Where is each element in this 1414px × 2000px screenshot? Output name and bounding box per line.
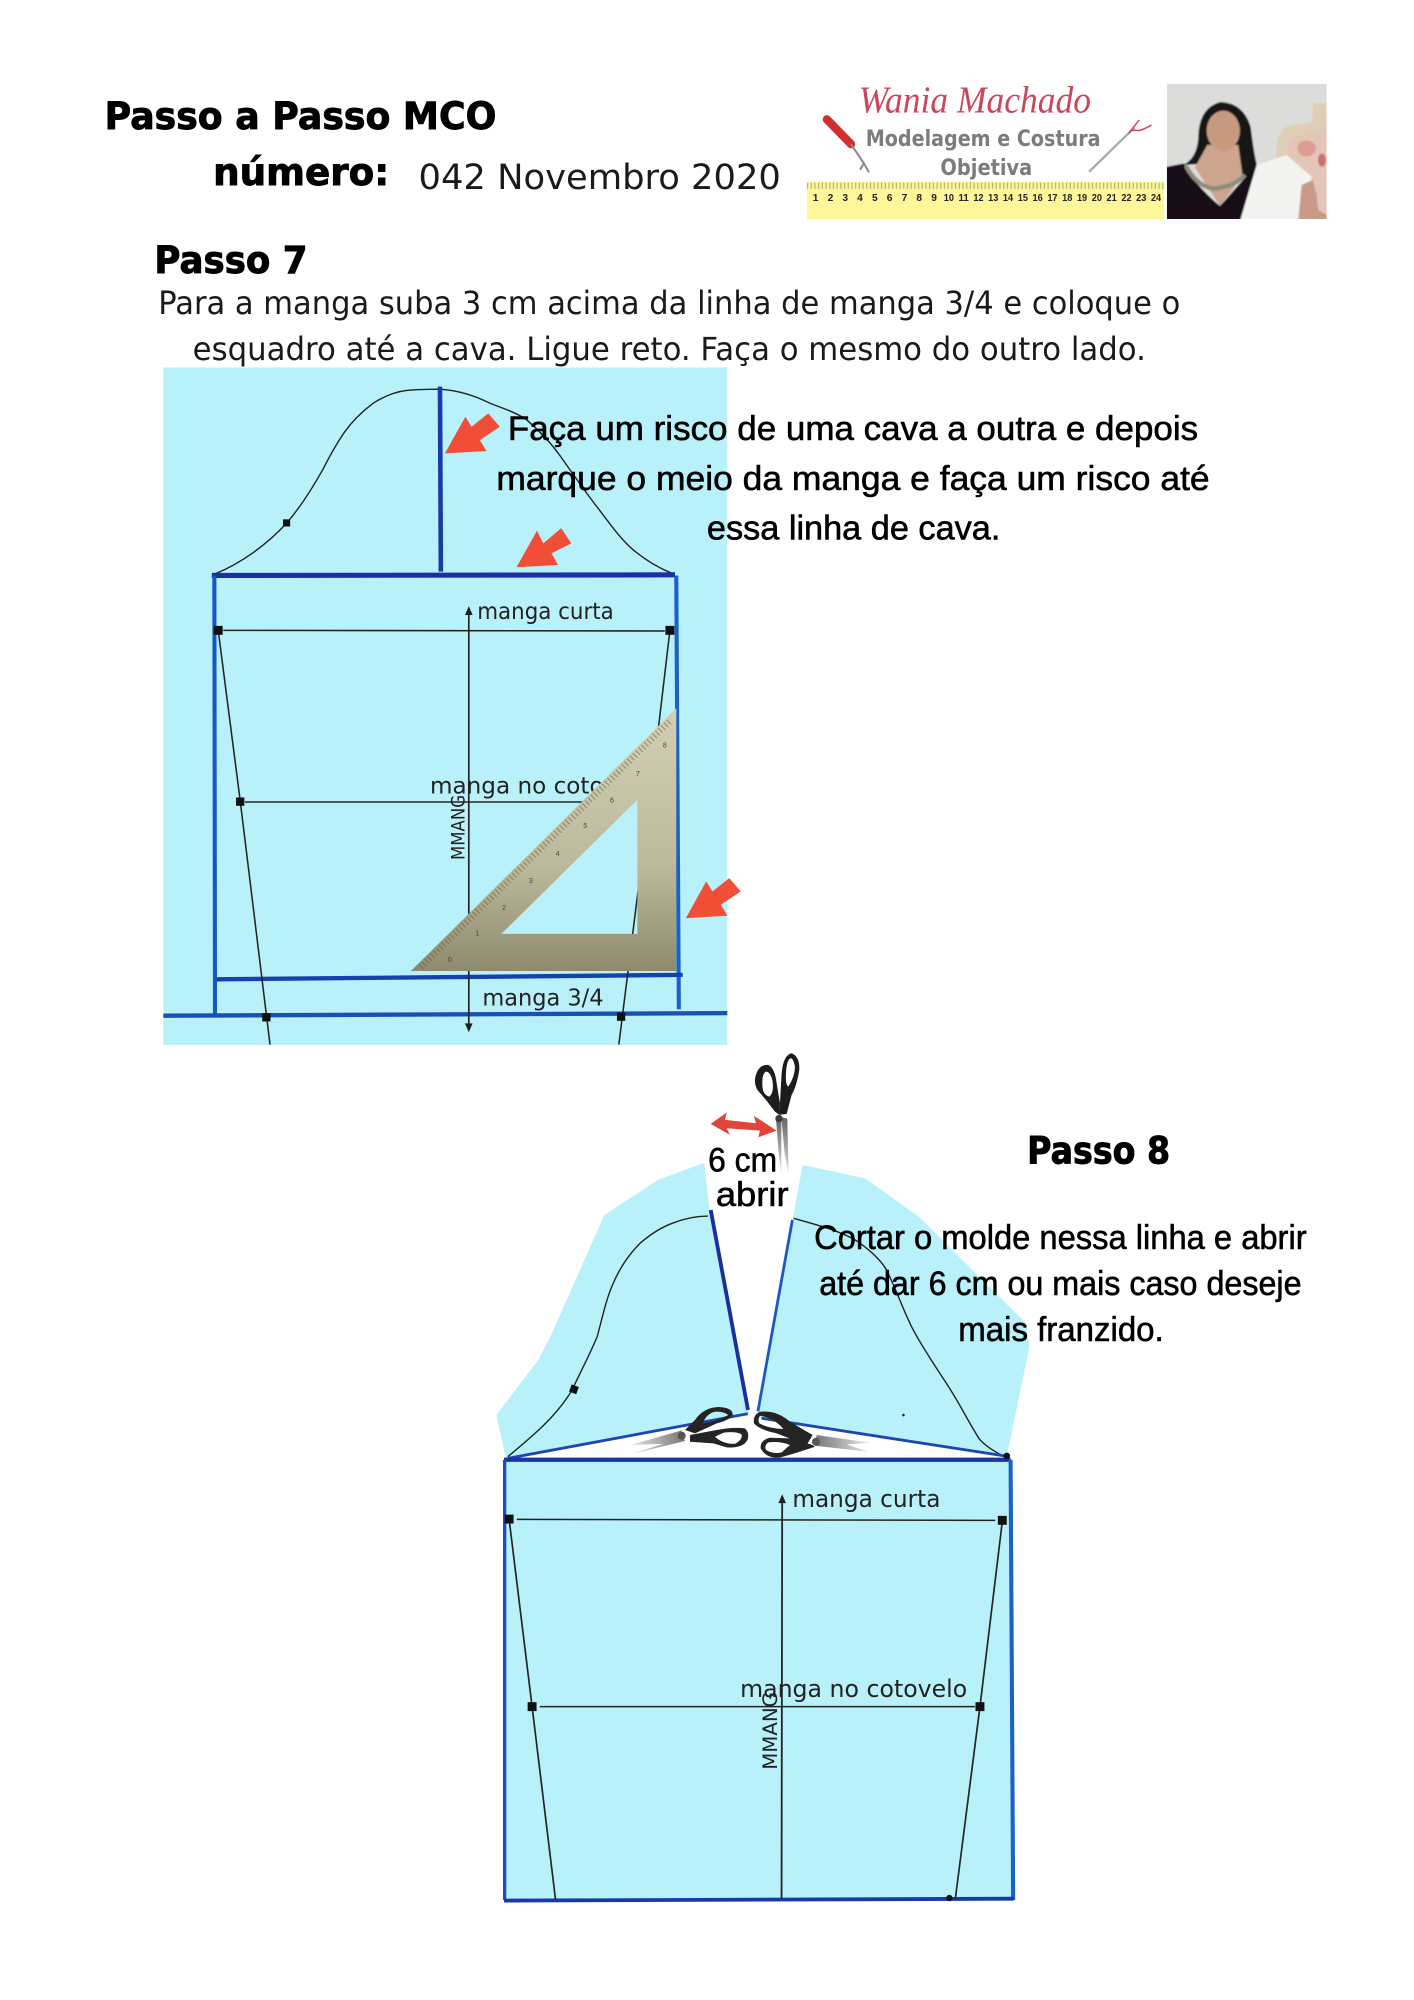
measuring tape: 21 bbox=[1107, 193, 1117, 204]
measuring tape: 19 bbox=[1077, 193, 1087, 204]
text block: risk instruction: marque o meio da manga e faça um risco até bbox=[496, 460, 1210, 498]
header title: número: bbox=[213, 151, 389, 194]
panel: step 7 sleeve pattern bbox=[163, 367, 727, 1045]
text block: risk instruction bbox=[496, 410, 1210, 548]
label: manga 3/4: manga 3/4 bbox=[482, 985, 604, 1011]
text block: step 7 instructions: Para a manga suba 3 cm acima da linha de manga 3/4 e coloque o bbox=[158, 284, 1180, 322]
icon: set square ruler: 3 bbox=[529, 878, 533, 885]
icon: set square ruler: 8 bbox=[663, 743, 667, 750]
text block: step 8 instructions bbox=[814, 1219, 1307, 1349]
text: 6 cm abrir bbox=[708, 1141, 789, 1214]
header title bbox=[105, 95, 781, 198]
measuring tape bbox=[807, 182, 1164, 219]
label: manga no cotovelo: manga no cotovelo bbox=[430, 774, 652, 800]
center cut line bbox=[438, 387, 443, 572]
measuring tape: 8 bbox=[916, 193, 922, 204]
right cap piece bbox=[758, 1165, 1029, 1457]
marker squares bbox=[214, 626, 674, 1021]
measuring tape: 13 bbox=[988, 193, 999, 204]
measuring tape: 7 bbox=[902, 193, 908, 204]
measuring tape: 15 bbox=[1018, 193, 1028, 204]
text: 6 cm abrir: 6 cm bbox=[708, 1141, 777, 1179]
measuring tape: 22 bbox=[1121, 193, 1132, 204]
text block: step 8 instructions: mais franzido. bbox=[958, 1311, 1164, 1349]
icon: scissors right bbox=[754, 1412, 870, 1458]
icon: scissors top bbox=[755, 1053, 799, 1173]
text block: step 7 instructions: esquadro até a cava. Ligue reto. Faça o mesmo do outro lado. bbox=[193, 330, 1146, 368]
measuring tape: 10 bbox=[944, 193, 954, 204]
measuring tape: 12 bbox=[973, 193, 984, 204]
measuring tape: 24 bbox=[1151, 193, 1161, 204]
logo subtitle: Objetiva bbox=[940, 155, 1032, 181]
logo: Modelagem e Costura Objetiva bbox=[806, 79, 1166, 219]
label: MMANG: MMANG bbox=[448, 795, 469, 860]
sleeve cap curve bbox=[214, 389, 671, 574]
measuring tape: 11 bbox=[959, 193, 969, 204]
opened cut lines bbox=[504, 1210, 1014, 1901]
icon: set square ruler: 7 bbox=[636, 771, 640, 778]
measuring tape: 18 bbox=[1062, 193, 1073, 204]
arrow: red double arrow 6 cm bbox=[711, 1113, 777, 1137]
heading: Passo 7: Passo 7 bbox=[154, 239, 308, 282]
logo script name: Wania Machado bbox=[859, 79, 1091, 121]
measuring tape: 5 bbox=[872, 193, 878, 204]
measuring tape: 1 bbox=[813, 193, 819, 204]
measuring tape: 23 bbox=[1136, 193, 1147, 204]
arrow: red pointing at side line bbox=[686, 878, 741, 918]
arrow: red pointing at armhole line bbox=[517, 528, 571, 567]
text block: risk instruction: essa linha de cava. bbox=[707, 510, 1000, 548]
measuring tape: 16 bbox=[1033, 193, 1043, 204]
measuring tape: 17 bbox=[1047, 193, 1058, 204]
text block: step 7 instructions bbox=[158, 284, 1180, 368]
measuring tape: 6 bbox=[887, 193, 893, 204]
text block: step 8 instructions: Cortar o molde nessa linha e abrir bbox=[814, 1219, 1307, 1257]
author photo bbox=[1166, 84, 1327, 219]
text block: risk instruction: Faça um risco de uma cava a outra e depois bbox=[508, 410, 1198, 448]
logo subtitle bbox=[866, 126, 1101, 181]
icon: scissors left bbox=[630, 1407, 748, 1454]
icon: set square ruler: 5 bbox=[583, 823, 587, 830]
measuring tape: 2 bbox=[828, 193, 834, 204]
heading: Passo 8: Passo 8 bbox=[1027, 1130, 1170, 1173]
icon: set square ruler: 0 bbox=[448, 957, 452, 964]
logo subtitle: Modelagem e Costura bbox=[866, 126, 1101, 152]
icon: set square ruler: 4 bbox=[556, 851, 560, 858]
icon: set square ruler bbox=[411, 708, 676, 971]
measuring tape: 3 bbox=[842, 193, 848, 204]
arrow: red pointing at center line bbox=[445, 413, 500, 453]
marker squares bbox=[505, 1453, 1010, 1901]
left cap piece bbox=[496, 1164, 749, 1458]
cap curves bbox=[508, 1216, 1004, 1457]
icon: set square ruler: 1 bbox=[475, 930, 479, 937]
measuring tape: 20 bbox=[1092, 193, 1102, 204]
label: manga no cotovelo: manga no cotovelo bbox=[740, 1675, 967, 1703]
sleeve construction lines bbox=[163, 575, 727, 1045]
text: 6 cm abrir: abrir bbox=[716, 1176, 789, 1214]
measuring tape: 14 bbox=[1003, 193, 1013, 204]
header title: 042 Novembro 2020 bbox=[419, 158, 781, 198]
icon: set square ruler: 2 bbox=[502, 905, 506, 912]
sleeve body bbox=[504, 1460, 1014, 1900]
measuring tape: 4 bbox=[857, 193, 863, 204]
label: manga curta: manga curta bbox=[792, 1485, 940, 1513]
header title: Passo a Passo MCO bbox=[105, 95, 496, 138]
icon: set square ruler: 6 bbox=[610, 798, 614, 805]
icon: needle and thread bbox=[1089, 120, 1151, 172]
label: MMANG: MMANG bbox=[759, 1692, 782, 1770]
text block: step 8 instructions: até dar 6 cm ou mais caso deseje bbox=[819, 1265, 1302, 1303]
panel: step 8 opened sleeve pattern bbox=[496, 1164, 1029, 1901]
measuring tape: 9 bbox=[931, 193, 937, 204]
icon: seam ripper bbox=[827, 119, 869, 172]
label: manga curta: manga curta bbox=[477, 599, 614, 625]
